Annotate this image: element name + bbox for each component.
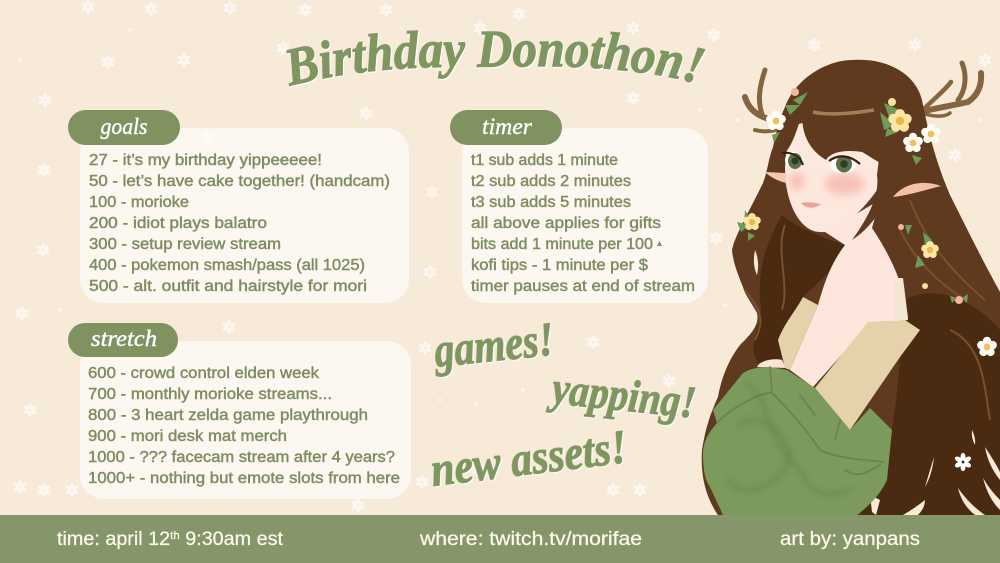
goals list: 50 - let’s have cake together! (handcam) — [89, 173, 390, 190]
mouth — [801, 202, 821, 208]
goals list: 100 - morioke — [89, 194, 189, 211]
panel: goals — [68, 110, 409, 303]
goals pill heading: goals — [100, 114, 148, 139]
flower crown — [766, 88, 941, 165]
bangs — [775, 81, 922, 170]
footer bar — [0, 515, 1000, 563]
skin: elbow peek — [757, 359, 786, 368]
left elf ear — [765, 172, 786, 183]
stretch pill heading: stretch — [91, 326, 157, 351]
back hair — [702, 60, 1000, 515]
dark hair under chin — [754, 215, 845, 366]
stretch list: 600 - crowd control elden week — [88, 365, 319, 382]
skin: neck, shoulder and arm — [790, 200, 908, 387]
right eye — [829, 156, 860, 173]
stretch list: 800 - 3 heart zelda game playthrough — [88, 407, 368, 424]
goals list: 500 - alt. outfit and hairstyle for mori — [89, 278, 367, 295]
timer list: bits add 1 minute per 100 — [471, 236, 653, 253]
title: Birthday Donothon! — [286, 30, 706, 88]
footer: time: th — [170, 530, 180, 542]
callout: new assets: new assets! — [428, 420, 630, 497]
white flower lower — [954, 453, 972, 471]
goals pill heading — [68, 110, 180, 145]
top ruffle straps — [895, 278, 908, 322]
goals list: 400 - pokemon smash/pass (all 1025) — [89, 257, 365, 274]
blush — [789, 172, 865, 195]
callout: games: games! — [431, 313, 556, 378]
dark hair mass lower right — [860, 293, 1000, 515]
right side hair — [852, 150, 896, 240]
stretch list: 900 - mori desk mat merch — [88, 428, 287, 445]
stretch list — [88, 365, 400, 487]
camisole top — [778, 297, 920, 430]
goals list: 27 - it’s my birthday yippeeeee! — [89, 152, 322, 169]
panel: stretch — [68, 323, 411, 499]
stretch list: 700 - monthly morioke streams... — [88, 386, 332, 403]
stretch list: 1000 - ??? facecam stream after 4 years? — [88, 449, 395, 466]
footer: time: time: april 12 — [57, 529, 166, 550]
timer pill heading — [450, 110, 562, 145]
white flower right — [977, 337, 997, 356]
goals list — [89, 152, 390, 295]
timer pill heading: timer — [482, 114, 533, 139]
timer list: t1 sub adds 1 minute — [471, 152, 618, 169]
hair flowers — [737, 210, 968, 304]
panel: timer — [450, 110, 708, 303]
footer: where: where: twitch.tv/morifae — [419, 529, 642, 550]
left eye — [782, 152, 803, 169]
goals list: 200 - idiot plays balatro — [89, 215, 267, 232]
goals list: 300 - setup review stream — [89, 236, 281, 253]
timer list: t3 sub adds 5 minutes — [471, 194, 631, 211]
green cardigan — [703, 367, 892, 515]
cardigan shading — [717, 367, 884, 494]
timer list: all above applies for gifts — [471, 215, 661, 232]
lighter strands — [745, 200, 990, 420]
timer list: t2 sub adds 2 minutes — [471, 173, 631, 190]
timer list: timer pauses at end of stream — [471, 278, 695, 295]
timer list — [471, 152, 695, 295]
face — [785, 110, 880, 232]
timer list: kofi tips - 1 minute per $ — [471, 257, 648, 274]
footer: time: 9:30am est — [180, 529, 284, 550]
stretch list: 1000+ - nothing but emote slots from here — [88, 470, 400, 487]
illustration: forest elf girl — [702, 60, 1000, 515]
hair highlight — [813, 110, 874, 114]
antlers — [745, 63, 981, 131]
icon: bits triangle — [657, 241, 662, 246]
hair gaps — [754, 250, 1000, 515]
footer: art credit: art by: yanpans — [780, 529, 920, 550]
stretch pill heading — [68, 323, 178, 357]
right elf ear — [893, 183, 941, 197]
callout: yapping: yapping! — [546, 362, 698, 428]
